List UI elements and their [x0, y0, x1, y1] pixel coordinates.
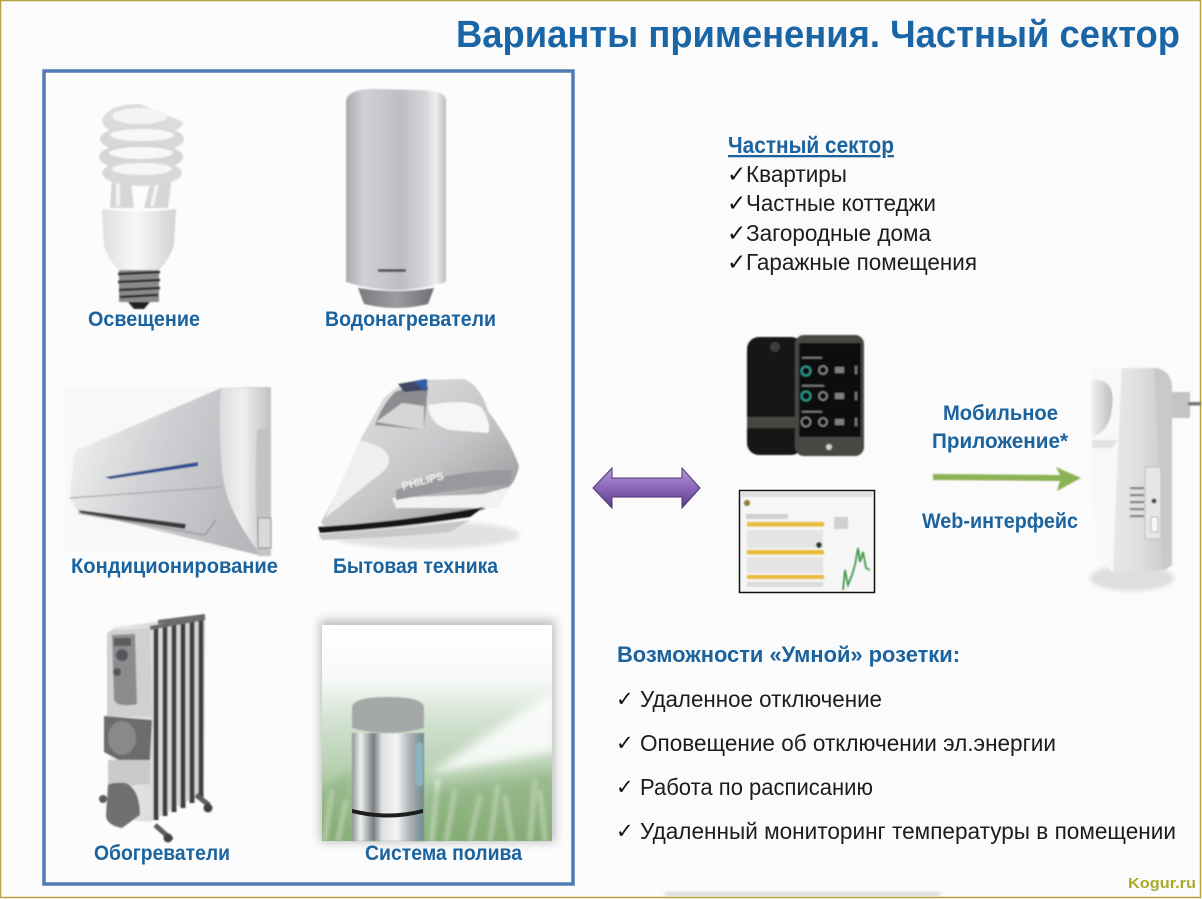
features heading: Возможности «Умной» розетки: — [617, 642, 960, 667]
panel: appliance types — [44, 71, 573, 884]
list heading: Частный сектор — [728, 132, 894, 158]
icon: oil radiator — [99, 616, 212, 842]
label: home appliances: Бытовая техника — [333, 555, 498, 578]
text block: smart socket features: Оповещение об отключении эл.энергии — [640, 730, 1056, 756]
icon: smart socket — [1090, 368, 1201, 591]
label: app asterisk line: Приложение* — [932, 430, 1069, 453]
text block: smart socket features: ✓ — [616, 775, 634, 799]
icon: web interface screenshot — [740, 490, 874, 592]
icon: steam iron: PHILIPS — [401, 470, 445, 493]
text block: private sector list: ✓ — [727, 250, 746, 276]
text block: private sector list: ✓ — [727, 162, 746, 188]
text block: smart socket features: Работа по расписанию — [640, 774, 873, 800]
arrow: green — [933, 467, 1081, 491]
icon: energy-saving bulb — [99, 104, 184, 309]
icon: air conditioner — [65, 387, 271, 556]
icon: water heater — [346, 89, 446, 308]
icon: smartphones — [747, 335, 864, 456]
icon: sprinkler photo — [318, 620, 556, 845]
bottom faint smudge — [665, 892, 940, 896]
text block: smart socket features: ✓ — [616, 819, 634, 843]
text block: private sector list: Частные коттеджи — [746, 190, 936, 216]
label: web interface: Web-интерфейс — [922, 510, 1078, 533]
label: heaters: Обогреватели — [94, 842, 230, 865]
icon: steam iron — [318, 379, 520, 549]
text block: private sector list: Загородные дома — [746, 220, 931, 246]
title: Варианты применения. Частный сектор — [456, 14, 1180, 56]
text block: smart socket features: ✓ — [616, 731, 634, 755]
label: water heaters: Водонагреватели — [325, 308, 496, 331]
text block: smart socket features: Удаленное отключение — [640, 686, 882, 712]
arrow: double-headed purple — [593, 468, 700, 508]
text block: private sector list — [727, 132, 977, 276]
label: irrigation: Система полива — [365, 842, 522, 865]
label: mobile app: Мобильное — [943, 402, 1058, 425]
text block: private sector list: ✓ — [727, 221, 746, 247]
label: air conditioning: Кондиционирование — [71, 555, 278, 578]
text block: private sector list: ✓ — [727, 191, 746, 217]
text block: private sector list: Гаражные помещения — [746, 249, 977, 275]
text block: smart socket features — [616, 642, 1176, 844]
text block: private sector list: Квартиры — [746, 161, 847, 187]
text block: smart socket features: ✓ — [616, 687, 634, 711]
watermark: Kogur.ru — [1128, 875, 1196, 892]
label: lighting: Освещение — [88, 308, 200, 331]
text block: smart socket features: Удаленный мониторинг температуры в помещении — [640, 818, 1176, 844]
